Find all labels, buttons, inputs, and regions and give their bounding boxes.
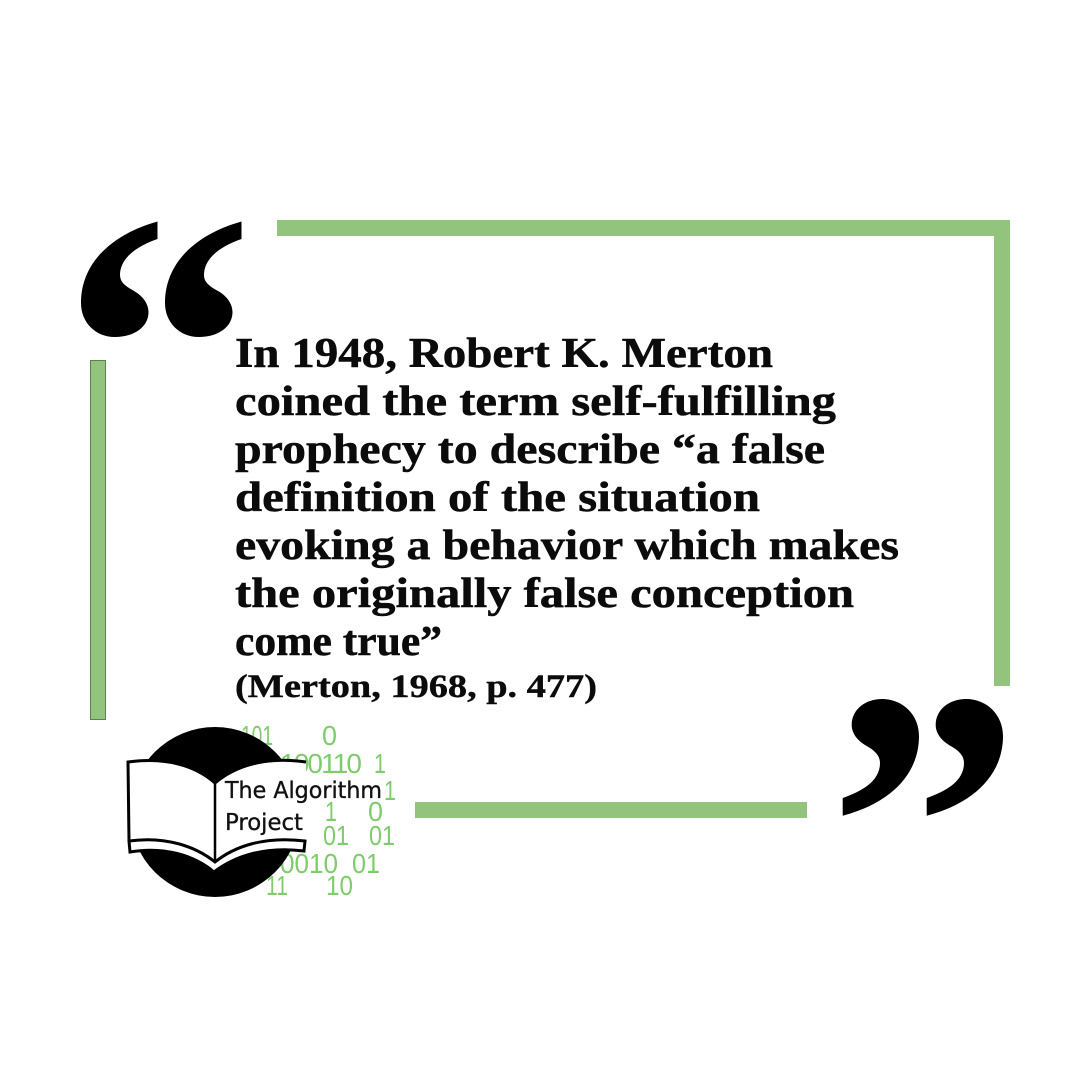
- logo: binary digits: 11: [266, 870, 288, 901]
- logo: binary digits: 10: [326, 870, 353, 901]
- quote text: come true”: [235, 619, 442, 665]
- logo: The Algorithm Project: [127, 720, 396, 901]
- quote text: the originally false conception: [235, 571, 854, 617]
- logo: binary digits: 1: [374, 748, 386, 779]
- citation: (Merton, 1968, p. 477): [235, 669, 597, 705]
- green frame: left bar: [90, 360, 106, 720]
- logo: binary digits: 01: [369, 820, 395, 851]
- logo: open book: [127, 760, 306, 872]
- quote text: [235, 331, 899, 665]
- quote text: definition of the situation: [235, 475, 760, 521]
- quote text: evoking a behavior which makes: [235, 523, 899, 569]
- logo: binary digits: 101: [241, 720, 273, 751]
- logo: binary digits: 0: [322, 720, 337, 751]
- green frame: bottom bar: [415, 802, 807, 818]
- logo: binary digits: 01: [323, 820, 349, 851]
- quote text: In 1948, Robert K. Merton: [235, 331, 773, 377]
- logo: wordmark: Project: [225, 810, 303, 836]
- green frame: right bar: [994, 220, 1010, 686]
- quote text: coined the term self-fulfilling: [235, 379, 836, 425]
- quote text: prophecy to describe “a false: [235, 427, 825, 473]
- icon: opening quotation mark: [81, 222, 242, 337]
- green frame: top bar: [277, 220, 1010, 236]
- logo: binary digits: 01: [352, 848, 380, 879]
- icon: closing quotation mark: [843, 699, 1003, 816]
- logo: binary digits: 0010: [280, 848, 338, 879]
- logo: binary digits: 1: [325, 796, 337, 827]
- logo: binary digits: 1: [384, 775, 396, 806]
- logo: wordmark: The Algorithm: [224, 778, 382, 804]
- logo: binary digits: [241, 720, 396, 901]
- logo: wordmark: [224, 778, 382, 836]
- logo: binary digits: 100110: [280, 748, 362, 779]
- logo: binary digits: 0: [368, 796, 383, 827]
- logo: black circle: [130, 727, 300, 897]
